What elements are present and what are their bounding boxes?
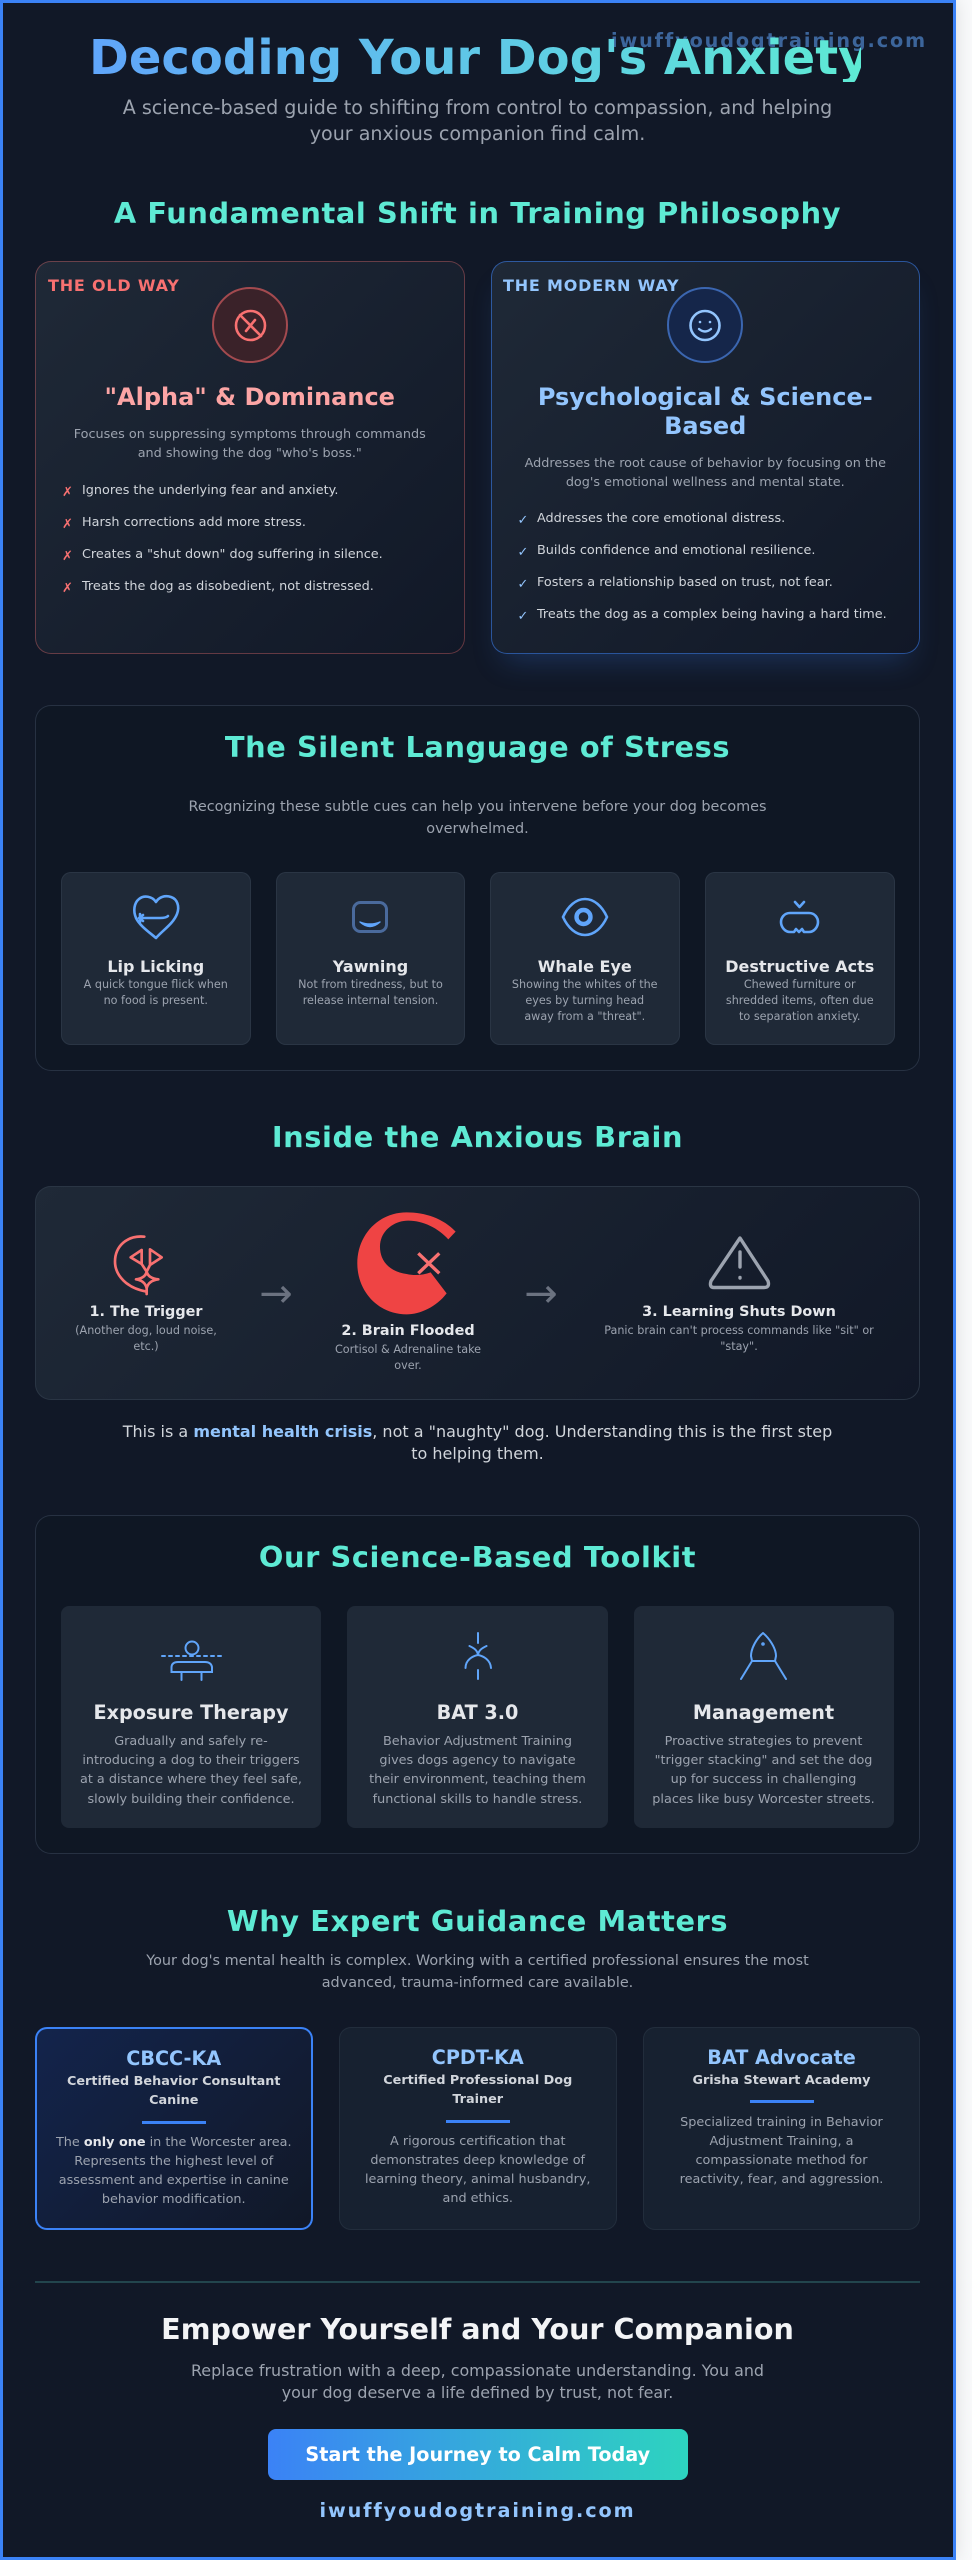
CBCC text: behavior modification. (102, 2192, 246, 2207)
whale eye text: Showing the whites of the (512, 978, 658, 991)
BAT advocate text: Adjustment Training, a (709, 2134, 854, 2149)
BAT text: gives dogs agency to navigate (379, 1753, 576, 1768)
closing heading: Empower Yourself and Your Companion (161, 2312, 794, 2346)
subtitle (123, 96, 832, 145)
card: BAT advocate (643, 2027, 920, 2230)
CPDT title: CPDT-KA (432, 2046, 524, 2069)
management text: places like busy Worcester streets. (652, 1792, 875, 1807)
CBCC text: The only one in the Worcester area. (56, 2135, 292, 2150)
modern way list: Treats the dog as a complex being having a hard time. (537, 607, 887, 622)
yawning text (298, 978, 443, 1007)
management text: up for success in challenging (671, 1772, 856, 1787)
modern way list: Fosters a relationship based on trust, not fear. (537, 575, 833, 590)
old way heading: "Alpha" & Dominance (105, 383, 395, 411)
CBCC text: Represents the highest level of (74, 2154, 273, 2169)
old way description: Focuses on suppressing symptoms through commands (74, 427, 426, 442)
whale eye text: eyes by turning head (525, 994, 644, 1007)
expert intro (146, 1953, 809, 1991)
BAT advocate rule (750, 2100, 814, 2103)
exposure title: Exposure Therapy (93, 1701, 289, 1724)
heading: training philosophy: A Fundamental Shift in Training Philosophy (114, 196, 841, 230)
BAT advocate text: Specialized training in Behavior (680, 2115, 883, 2130)
destructive acts text (726, 978, 874, 1023)
modern way description (524, 456, 886, 490)
icon: BAT figure (464, 1632, 492, 1680)
management text: Proactive strategies to prevent (665, 1734, 862, 1749)
old way list: ✗ (62, 549, 73, 564)
icon: chewed object (780, 900, 820, 934)
step 3: learning shuts down (604, 1236, 874, 1353)
whale eye title: Whale Eye (538, 956, 632, 976)
icon: trigger (114, 1235, 164, 1296)
icon: rocket (740, 1632, 787, 1680)
old way list: ✗ (62, 517, 73, 532)
heading: expert guidance: Why Expert Guidance Matters (227, 1904, 728, 1938)
destructive acts title: Destructive Acts (725, 956, 874, 976)
destructive acts text: Chewed furniture or (744, 978, 856, 991)
modern way list: Builds confidence and emotional resilience. (537, 543, 815, 558)
old way description: and showing the dog "who's boss." (138, 446, 362, 461)
CPDT subtitle (383, 2073, 572, 2107)
old way list: Creates a "shut down" dog suffering in silence. (82, 547, 383, 562)
trigger title: 1. The Trigger (89, 1304, 203, 1320)
closing text (191, 2360, 764, 2402)
management title: Management (693, 1701, 834, 1724)
management text: "trigger stacking" and set the dog (655, 1753, 872, 1768)
modern way heading: Psychological & Science- (538, 383, 873, 411)
icon: eye (562, 898, 608, 936)
callout: mental health crisis (122, 1422, 832, 1462)
learning text (604, 1324, 874, 1353)
modern way label: THE MODERN WAY (503, 276, 679, 295)
old way list: Treats the dog as disobedient, not distressed. (82, 579, 374, 594)
CBCC title: CBCC-KA (126, 2047, 221, 2070)
card: BAT 3.0 (347, 1606, 608, 1828)
CBCC text (56, 2135, 292, 2207)
lip licking text (84, 978, 228, 1007)
card: yawning (276, 872, 465, 1045)
CPDT text: and ethics. (442, 2191, 513, 2206)
BAT advocate title: BAT Advocate (707, 2046, 856, 2069)
panel: toolkit (35, 1515, 920, 1854)
exposure text: Gradually and safely re- (114, 1734, 268, 1749)
learning text: Panic brain can't process commands like "sit" or (604, 1324, 874, 1337)
modern way description: dog's emotional wellness and mental state. (566, 475, 845, 490)
modern way list (518, 511, 887, 624)
icon: flooded brain (357, 1212, 456, 1314)
old way list: ✗ (62, 485, 73, 500)
brain flooded text: Cortisol & Adrenaline take (335, 1343, 481, 1356)
card: destructive acts (705, 872, 894, 1045)
yawning text: release internal tension. (303, 994, 438, 1007)
callout: mental health crisis: to helping them. (411, 1444, 544, 1462)
expert intro: advanced, trauma-informed care available. (322, 1975, 633, 1991)
exposure text: slowly building their confidence. (87, 1792, 295, 1807)
card: whale eye (490, 872, 680, 1045)
learning title: 3. Learning Shuts Down (642, 1304, 836, 1320)
stress intro (188, 799, 766, 837)
old way list: Ignores the underlying fear and anxiety. (82, 483, 338, 498)
brain flooded title: 2. Brain Flooded (341, 1323, 475, 1339)
BAT advocate subtitle: Grisha Stewart Academy (692, 2073, 870, 2088)
card: exposure therapy (61, 1606, 321, 1828)
footer url: iwuffyoudogtraining.com (320, 2499, 636, 2522)
old way list (62, 483, 383, 596)
arrow 1: → (259, 1271, 293, 1317)
exposure text (80, 1734, 302, 1807)
destructive acts text: shredded items, often due (726, 994, 874, 1007)
CPDT rule (446, 2120, 510, 2123)
arrow 2: → (524, 1271, 558, 1317)
CBCC subtitle (67, 2074, 281, 2108)
whale eye text: away from a "threat". (524, 1010, 645, 1023)
CBCC subtitle: Certified Behavior Consultant (67, 2074, 281, 2089)
subtitle: your anxious companion find calm. (310, 122, 645, 145)
icon: yawning mouth (352, 901, 388, 933)
modern way heading (538, 383, 873, 440)
CPDT subtitle: Trainer (452, 2092, 503, 2107)
panel: brain flow (35, 1186, 920, 1400)
lip licking text: no food is present. (104, 994, 208, 1007)
trigger text: (Another dog, loud noise, (75, 1324, 217, 1337)
call-to-action button (268, 2429, 688, 2480)
lip licking text: A quick tongue flick when (84, 978, 228, 991)
CPDT text (365, 2134, 590, 2206)
call-to-action button: Start the Journey to Calm Today (305, 2443, 650, 2466)
step 1: the trigger (75, 1235, 217, 1353)
card: CPDT-KA (338, 2027, 617, 2230)
closing text: Replace frustration with a deep, compassionate understanding. You and (191, 2360, 764, 2380)
BAT text: functional skills to handle stress. (373, 1792, 582, 1807)
CBCC text: assessment and expertise in canine (59, 2173, 289, 2188)
card: CBCC-KA (35, 2027, 312, 2230)
icon: smiley (667, 287, 743, 363)
CPDT subtitle: Certified Professional Dog (383, 2073, 572, 2088)
brain flooded text: over. (394, 1359, 422, 1372)
BAT advocate text (680, 2115, 883, 2187)
icon: heart with tongue (133, 894, 180, 940)
heading: anxious brain: Inside the Anxious Brain (272, 1120, 683, 1154)
card: lip licking (61, 872, 250, 1045)
stress intro: Recognizing these subtle cues can help you intervene before your dog becomes (188, 799, 766, 815)
BAT advocate text: compassionate method for (695, 2153, 868, 2168)
learning text: "stay". (720, 1340, 758, 1353)
whale eye text (512, 978, 658, 1023)
subtitle: A science-based guide to shifting from control to compassion, and helping (123, 96, 832, 119)
BAT advocate text: reactivity, fear, and aggression. (680, 2172, 883, 2187)
icon: exposure (161, 1640, 222, 1681)
lip licking title: Lip Licking (107, 956, 204, 976)
old way label: THE OLD WAY (48, 276, 180, 295)
BAT text (369, 1734, 586, 1807)
yawning title: Yawning (333, 956, 408, 976)
panel: silent language of stress (35, 705, 920, 1071)
exposure text: introducing a dog to their triggers (82, 1753, 300, 1768)
CPDT text: A rigorous certification that (390, 2134, 566, 2149)
toolkit heading: Our Science-Based Toolkit (259, 1540, 696, 1574)
modern way list: ✓ (518, 513, 528, 528)
expert intro: Your dog's mental health is complex. Working with a certified professional ensures the most (146, 1953, 809, 1969)
trigger text (75, 1324, 217, 1353)
modern way list: ✓ (518, 577, 528, 592)
modern way list: ✓ (518, 545, 528, 560)
step 2: brain flooded (335, 1212, 481, 1372)
CPDT text: demonstrates deep knowledge of (370, 2153, 585, 2168)
CBCC rule (142, 2121, 206, 2124)
BAT title: BAT 3.0 (437, 1701, 518, 1724)
stress intro: overwhelmed. (426, 821, 529, 837)
modern way list: ✓ (518, 609, 528, 624)
modern way heading: Based (664, 412, 746, 440)
BAT text: Behavior Adjustment Training (383, 1734, 572, 1749)
trigger text: etc.) (133, 1340, 159, 1353)
destructive acts text: to separation anxiety. (739, 1010, 860, 1023)
title: Decoding Your Dog's Anxiety (89, 30, 869, 86)
old way description (74, 427, 426, 461)
CBCC subtitle: Canine (149, 2093, 198, 2108)
callout: mental health crisis: This is a mental health crisis, not a "naughty" dog. Understanding this is the first step (123, 1422, 832, 1440)
BAT text: their environment, teaching them (369, 1772, 586, 1787)
card: management (634, 1606, 894, 1828)
exposure text: at a distance where they feel safe, (80, 1772, 302, 1787)
closing text: your dog deserve a life defined by trust, not fear. (282, 2382, 673, 2402)
panel: the old way (35, 261, 464, 654)
yawning text: Not from tiredness, but to (298, 978, 443, 991)
old way list: ✗ (62, 581, 73, 596)
stress heading: The Silent Language of Stress (225, 730, 730, 764)
modern way list: Addresses the core emotional distress. (537, 511, 785, 526)
icon: warning triangle (708, 1236, 770, 1290)
CPDT text: learning theory, animal husbandry, (365, 2172, 590, 2187)
modern way description: Addresses the root cause of behavior by focusing on the (525, 456, 886, 471)
management text (652, 1734, 875, 1807)
old way list: Harsh corrections add more stress. (82, 515, 306, 530)
watermark: site url: iwuffyoudogtraining.com (611, 29, 927, 52)
icon: crossed circle (212, 287, 288, 363)
panel: the modern way (490, 261, 920, 654)
brain flooded text (335, 1343, 481, 1372)
